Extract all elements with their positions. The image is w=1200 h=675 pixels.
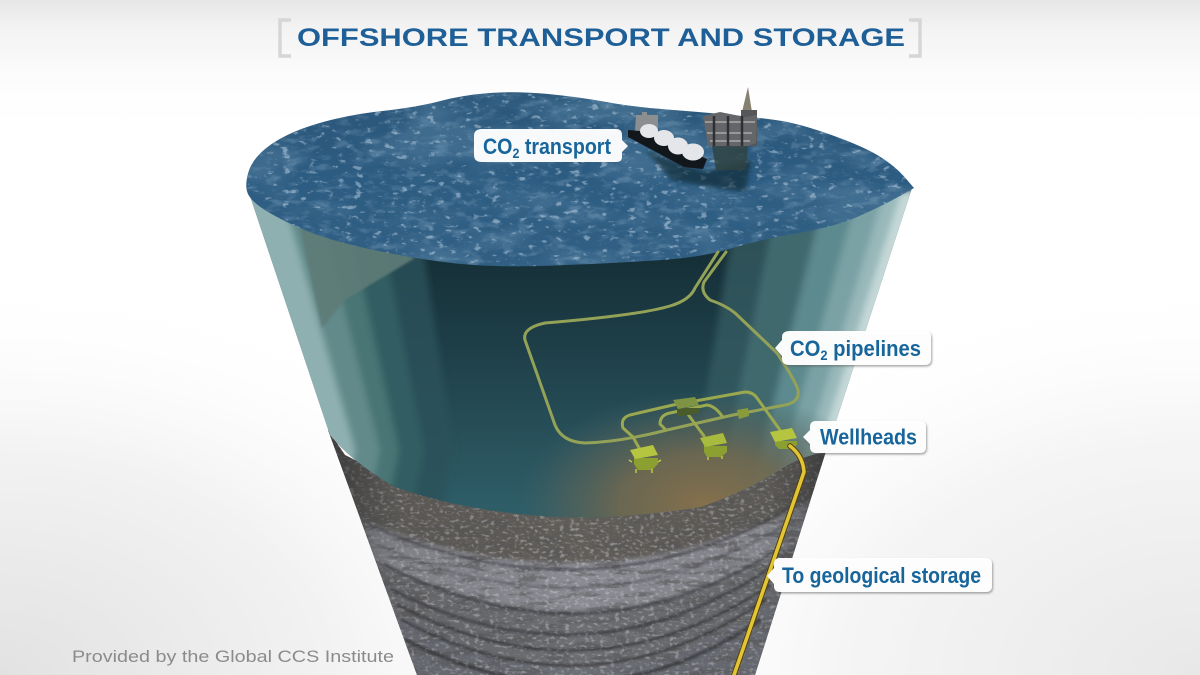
storage pipe xyxy=(734,446,804,675)
icon: wellhead two xyxy=(700,433,727,460)
title text: OFFSHORE TRANSPORT AND STORAGE xyxy=(297,24,905,52)
icon: offshore platform xyxy=(703,87,757,170)
manifold branches xyxy=(622,392,780,455)
rock cylinder xyxy=(320,430,840,675)
rock strata bands xyxy=(360,499,810,675)
title brackets xyxy=(280,20,920,56)
title xyxy=(280,20,920,56)
label: Wellheads xyxy=(803,421,926,453)
icon: CO2 tanker ship xyxy=(628,112,707,169)
upper left wall facet xyxy=(300,228,414,328)
label: CO2 pipelines: pipelines xyxy=(828,336,921,361)
label: CO2 transport: 2 xyxy=(512,145,520,161)
label: To geological storage xyxy=(767,558,992,592)
icon: central manifold xyxy=(673,397,699,416)
icon: wellhead one xyxy=(629,445,661,473)
ship and platform reflection xyxy=(645,150,752,192)
offshore vessels xyxy=(628,87,757,192)
left wall bands xyxy=(250,198,441,500)
main pipeline loop xyxy=(525,252,798,443)
pipelines xyxy=(525,252,798,455)
label: CO2 pipelines xyxy=(775,331,931,365)
label: CO2 pipelines: CO xyxy=(790,336,823,361)
sea surface xyxy=(240,85,920,275)
water column xyxy=(250,189,912,518)
label: CO2 pipelines: 2 xyxy=(820,347,828,363)
rock strata lines xyxy=(370,508,790,675)
label: To geological storage: To geological storage xyxy=(782,563,981,588)
label: CO2 transport: CO xyxy=(483,134,516,159)
icon: in-line connector xyxy=(737,408,749,419)
label: Wellheads: Wellheads xyxy=(820,424,917,450)
icon: wellhead three xyxy=(770,428,797,449)
credit: Provided by the Global CCS Institute xyxy=(72,648,394,666)
right wall bands xyxy=(706,190,912,498)
label: CO2 transport xyxy=(474,129,628,162)
label: CO2 transport: transport xyxy=(519,134,612,159)
wellheads and manifolds xyxy=(629,397,797,473)
